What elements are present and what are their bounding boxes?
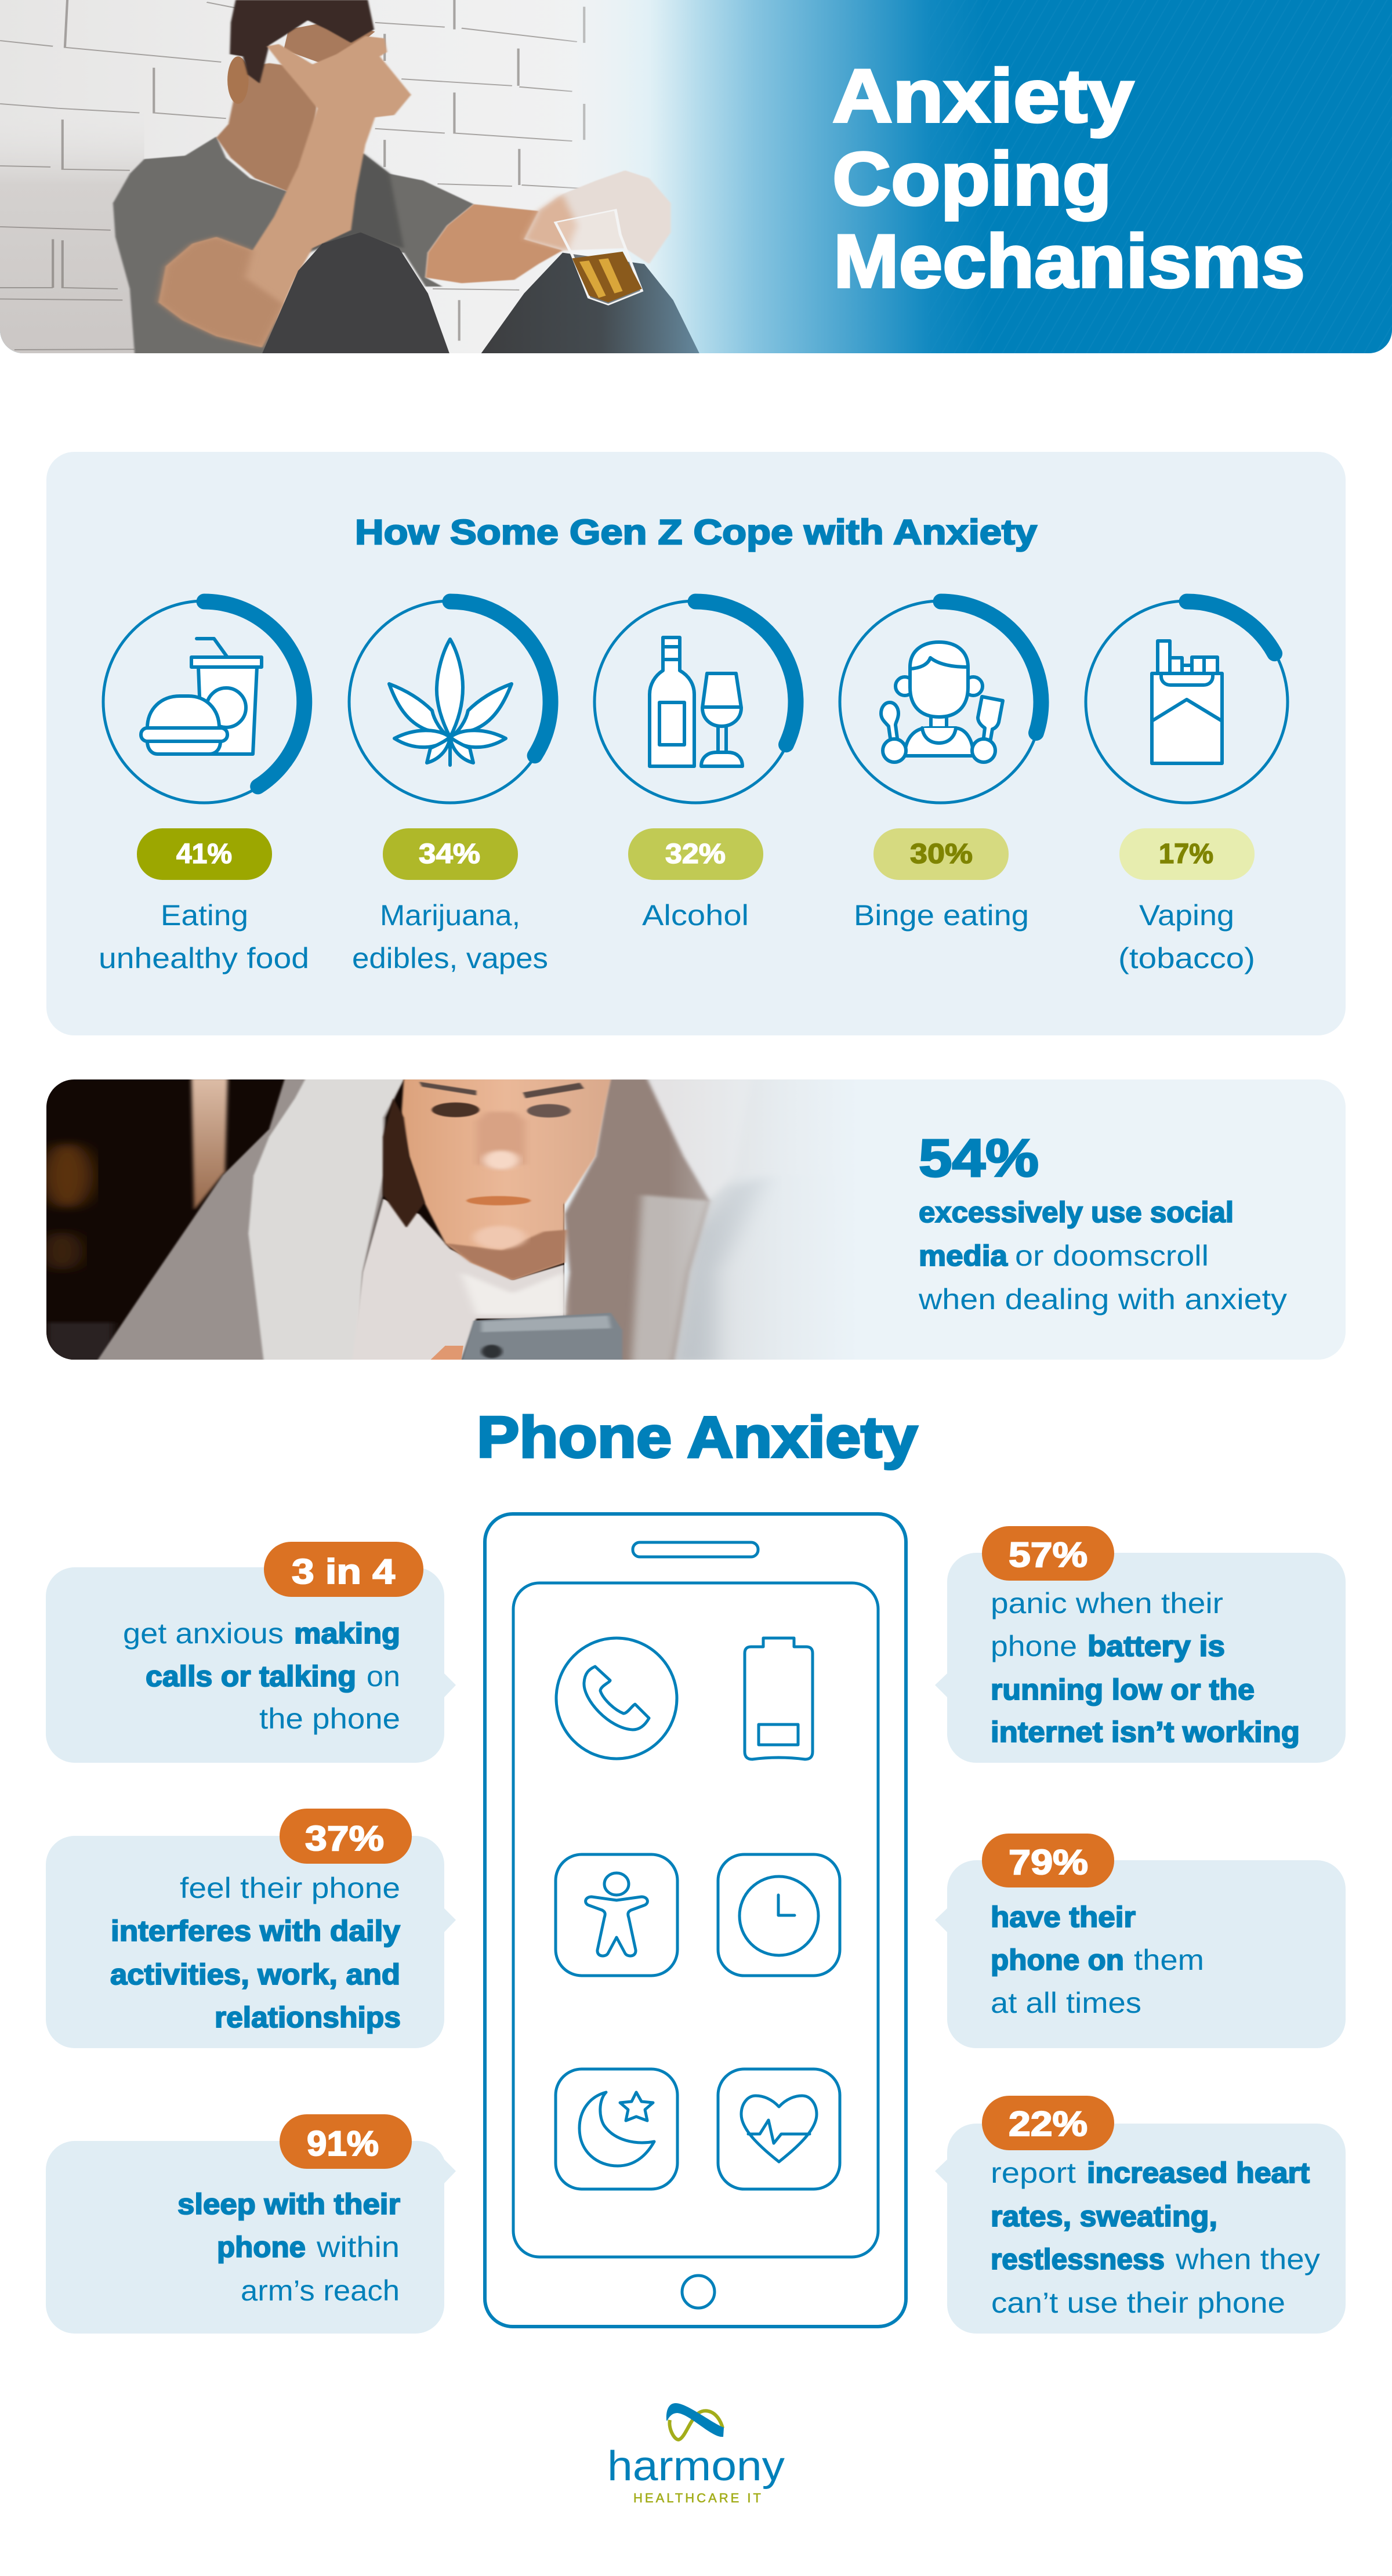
callout: 37%: relationships: [215, 2001, 401, 2034]
right arm: [426, 204, 563, 283]
callout: 22%: 22%: [1009, 2104, 1088, 2143]
stat: eating unhealthy food 41%: unhealthy food: [99, 942, 309, 974]
callout: 57%: internet isn’t working: [991, 1716, 1300, 1748]
forehead: [284, 24, 375, 63]
stat: binge eating 30%: 30%: [910, 839, 973, 869]
icon: cannabis leaf: [389, 639, 512, 765]
panel: social media stat: [41, 1079, 1346, 1363]
title: Mechanisms: [833, 219, 1305, 303]
callout: 79%: them: [1134, 1944, 1204, 1976]
callout: 22%: when they: [1175, 2243, 1320, 2276]
callout: 57%: [935, 1526, 1346, 1763]
callout: 79%: at all times: [991, 1987, 1141, 2019]
hatch texture: [928, 0, 1392, 353]
icon: person: [556, 1854, 677, 1976]
stat: binge eating 30%: [840, 601, 1042, 932]
icon: bottle and wine glass: [650, 637, 742, 766]
callout: 91%: within: [316, 2231, 400, 2263]
callout: 3 in 4: 3 in 4: [292, 1552, 396, 1591]
stat: marijuana 34%: 34%: [419, 839, 480, 869]
callout: 57%: running low or the: [991, 1673, 1255, 1706]
stat text: 54%: 54%: [919, 1129, 1039, 1188]
callout: 22%: increased heart: [1087, 2157, 1310, 2189]
icon: heart with pulse: [718, 2069, 840, 2189]
stat: eating unhealthy food 41%: 41%: [176, 839, 232, 869]
callout: 3 in 4: the phone: [259, 1702, 400, 1735]
icon: moon and star: [556, 2069, 677, 2189]
logo: harmony healthcare it: [607, 2403, 785, 2505]
left leg: [262, 233, 449, 354]
callout: 37%: 37%: [305, 1819, 384, 1858]
stat text: 54%: or doomscroll: [1015, 1240, 1209, 1272]
stat: binge eating 30%: Binge eating: [854, 899, 1029, 932]
callout: 3 in 4: on: [367, 1660, 400, 1693]
callout: 22%: report: [991, 2157, 1076, 2189]
stat: vaping 17%: [1086, 601, 1288, 974]
icon: cigarette pack: [1152, 641, 1222, 763]
icon: clock: [718, 1854, 840, 1976]
header banner: [0, 0, 1392, 354]
stat: marijuana 34%: Marijuana,: [380, 899, 520, 932]
stat: eating unhealthy food 41%: Eating: [161, 899, 248, 932]
panel: how Gen Z copes: [46, 452, 1346, 1035]
callout: 91%: arm’s reach: [241, 2274, 400, 2307]
ear: [227, 56, 249, 104]
callout: 79%: have their: [991, 1901, 1136, 1933]
callout: 3 in 4: making: [294, 1617, 400, 1650]
callout: 3 in 4: get anxious: [123, 1617, 284, 1650]
callout: 37%: feel their phone: [180, 1872, 400, 1904]
callout: 22%: rates, sweating,: [991, 2200, 1217, 2233]
callout: 3 in 4: [46, 1542, 456, 1763]
icon: person eating: [881, 642, 1003, 762]
callout: 79%: 79%: [1009, 1843, 1088, 1882]
callout: 91%: phone: [217, 2231, 306, 2263]
glass of whisky: [555, 210, 642, 305]
shirt: [113, 136, 474, 354]
panel heading: How Some Gen Z Cope with Anxiety: [355, 513, 1038, 552]
title: Anxiety: [832, 53, 1134, 138]
stat: alcohol 32%: 32%: [665, 839, 726, 869]
photo: girl under blanket looking at phone: [41, 1079, 889, 1363]
callout: 91%: 91%: [307, 2124, 379, 2163]
callout: 22%: can’t use their phone: [991, 2287, 1285, 2319]
stat text: 54%: excessively use social: [919, 1196, 1234, 1229]
logo: harmony healthcare it: harmony: [607, 2443, 785, 2490]
callout: 37%: interferes with daily: [111, 1915, 400, 1947]
callout: 79%: phone on: [991, 1944, 1124, 1976]
stat text: 54%: when dealing with anxiety: [918, 1283, 1287, 1316]
photo: man against brick wall holding a glass: [0, 0, 986, 354]
stat: alcohol 32%: [594, 601, 796, 932]
heading: phone anxiety: Phone Anxiety: [477, 1405, 918, 1470]
hand and forearm over face: [159, 36, 411, 347]
callout: 37%: [46, 1809, 456, 2048]
callout: 57%: battery is: [1088, 1630, 1225, 1662]
callout: 79%: [935, 1834, 1346, 2048]
logo mark: [666, 2403, 724, 2440]
stat: alcohol 32%: Alcohol: [642, 899, 749, 932]
callout: 22%: restlessness: [991, 2243, 1165, 2276]
callout: 22%: [935, 2096, 1346, 2334]
phone illustration: [485, 1514, 906, 2327]
stat: vaping 17%: Vaping: [1139, 899, 1234, 932]
stat: vaping 17%: 17%: [1159, 839, 1213, 869]
title: [832, 53, 1305, 303]
callout: 91%: sleep with their: [177, 2188, 400, 2220]
logo: harmony healthcare it: HEALTHCARE IT: [633, 2491, 761, 2505]
stat: marijuana 34%: [349, 601, 551, 974]
right leg: [481, 253, 699, 354]
hair: [230, 0, 374, 84]
title: Coping: [832, 136, 1112, 221]
stat text: 54%: [918, 1129, 1287, 1316]
stat text: 54%: media: [919, 1240, 1008, 1272]
callout: 3 in 4: calls or talking: [146, 1660, 356, 1693]
callout: 37%: activities, work, and: [110, 1958, 400, 1991]
icon: phone call: [556, 1638, 677, 1759]
callout: 57%: phone: [991, 1630, 1077, 1662]
callout: 57%: panic when their: [991, 1587, 1223, 1619]
icon: low battery: [745, 1638, 813, 1759]
stat: eating unhealthy food 41%: [99, 601, 309, 974]
callout: 57%: 57%: [1009, 1535, 1088, 1574]
stat: vaping 17%: (tobacco): [1118, 942, 1255, 974]
hand holding glass: [524, 171, 670, 264]
stat: marijuana 34%: edibles, vapes: [352, 942, 548, 974]
callout: 91%: [46, 2114, 456, 2334]
icon: burger and drink: [141, 639, 262, 754]
fade into blue: [551, 0, 986, 354]
neck and face: [216, 63, 317, 192]
